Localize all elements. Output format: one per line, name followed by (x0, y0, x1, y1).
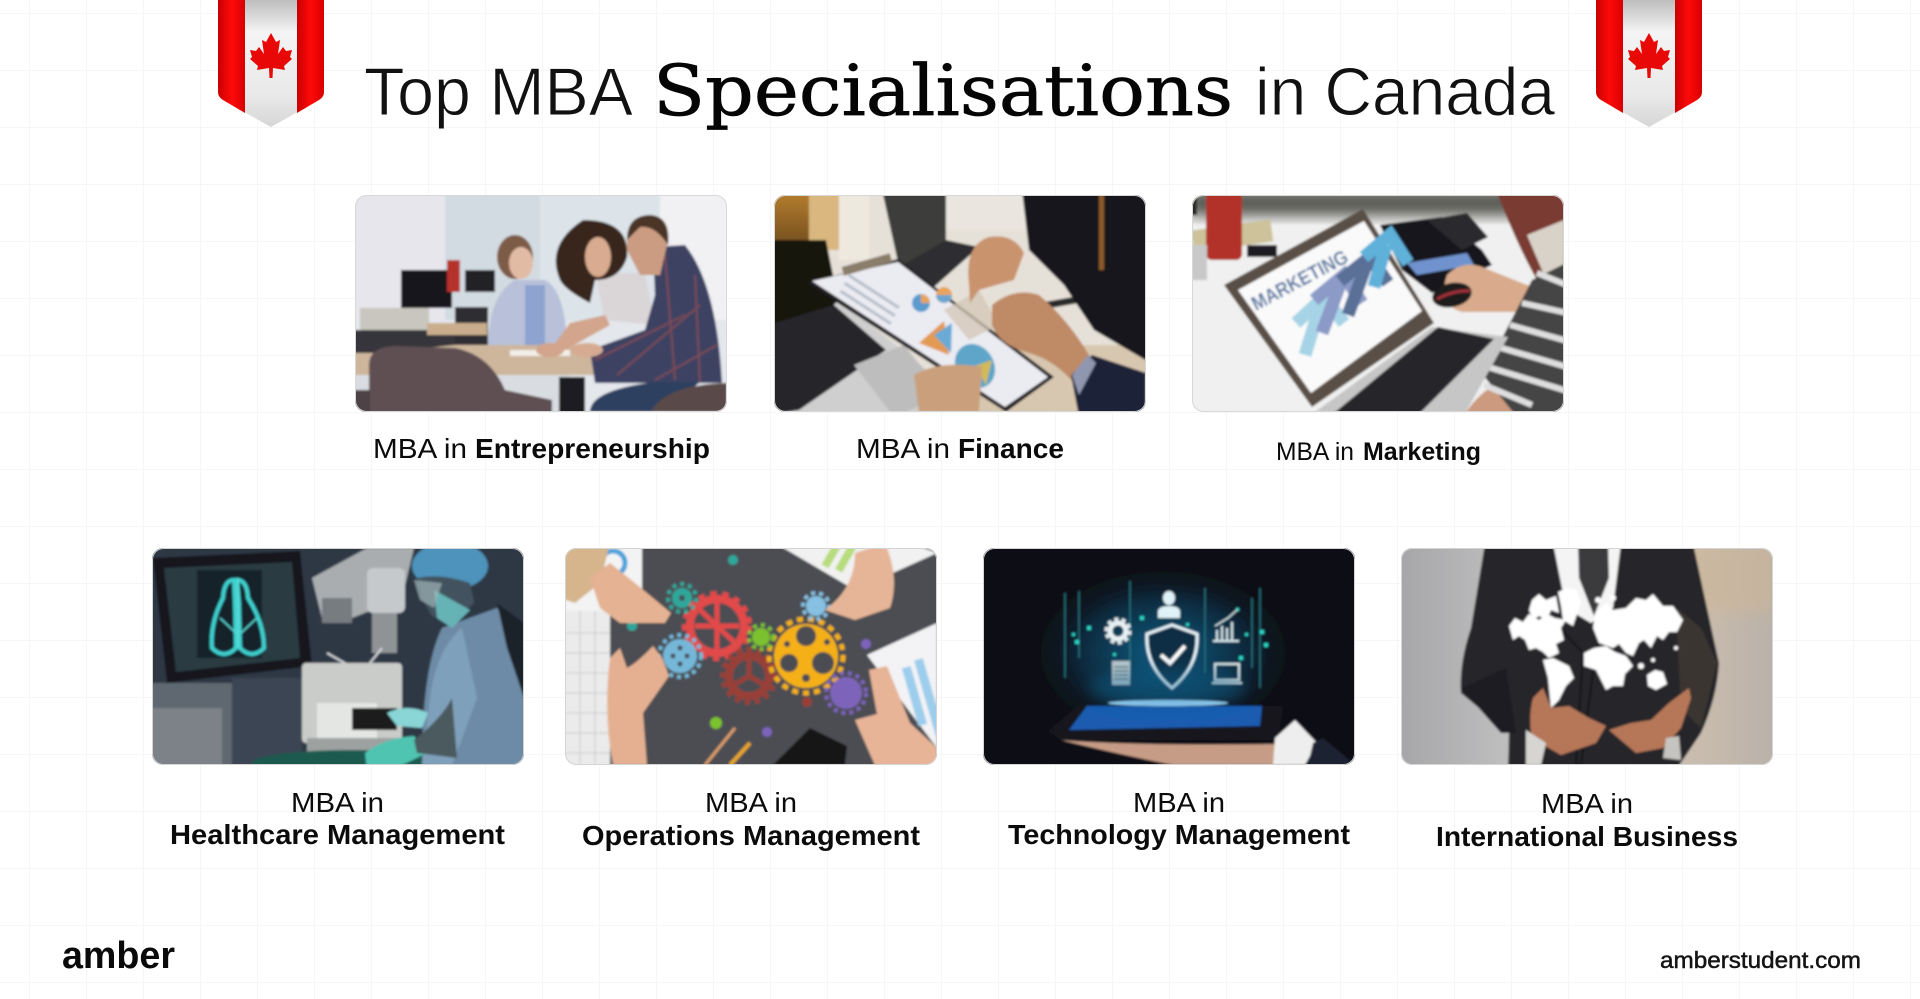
hands (968, 236, 1024, 303)
panel: MBA in Technology Management (978, 543, 1360, 850)
suit (1022, 190, 1154, 365)
flag: left Canadian banner (218, 0, 324, 127)
title (364, 50, 1555, 132)
logo: amber: amber (62, 935, 175, 977)
panel: MBA in Healthcare Management (147, 542, 529, 850)
caption: International Business: International Business (1436, 821, 1738, 852)
hands (565, 548, 610, 604)
caption: Finance: MBA in (856, 433, 950, 464)
caption: Operations Management: MBA in (705, 787, 797, 818)
gear (1110, 623, 1126, 639)
panel: MBA in Operations Management (560, 543, 945, 851)
flag: right Canadian banner (1596, 0, 1702, 127)
woman centre (595, 273, 655, 325)
document (1112, 661, 1130, 685)
hair and shirt (1497, 195, 1564, 280)
panel: MBA in Finance (769, 190, 1154, 464)
caption: Healthcare Management: Healthcare Management (170, 819, 505, 850)
caption: Entrepreneurship: MBA in (373, 433, 467, 464)
caption: Healthcare Management: MBA in (291, 787, 384, 818)
title: Specialisations (653, 50, 1233, 132)
caption: Operations Management (582, 787, 920, 851)
caption: Entrepreneurship: Entrepreneurship (475, 433, 710, 464)
caption: Healthcare Management (170, 787, 505, 850)
clipboard (807, 259, 1054, 412)
caption: Marketing: Marketing (1363, 438, 1481, 466)
panel: MBA in International Business (1396, 543, 1778, 852)
caption: Technology Management (1008, 787, 1350, 850)
caption: Entrepreneurship (373, 433, 710, 464)
caption: International Business: MBA in (1541, 788, 1633, 819)
pencils and phone (705, 728, 735, 765)
man (590, 245, 722, 383)
caption: Operations Management: Operations Management (582, 820, 920, 851)
person (1158, 591, 1180, 618)
caption: International Business (1436, 788, 1738, 852)
photo: team at a desk (350, 190, 732, 417)
photo: clipboard with charts (769, 190, 1154, 417)
gears (685, 594, 775, 702)
photo: businessman holding a world map (1396, 543, 1778, 770)
panel: MBA in Entrepreneurship (350, 190, 732, 464)
chart (1213, 610, 1239, 641)
photo: surgeon with medical scanner (147, 542, 529, 776)
caption: Marketing (1276, 438, 1481, 466)
photo: holographic security icons above a tablet (978, 543, 1360, 770)
tablet (1048, 705, 1283, 740)
world map (1509, 588, 1683, 708)
items on desk (1380, 217, 1492, 293)
caption: Technology Management: MBA in (1133, 787, 1225, 818)
shield (1147, 625, 1197, 688)
panel: MBA in Marketing (1187, 190, 1572, 466)
photo: hands assembling gears (560, 543, 945, 771)
caption: Technology Management: Technology Management (1008, 819, 1350, 850)
hands (1530, 688, 1606, 755)
woman left (488, 280, 567, 345)
website url: amberstudent.com (1660, 947, 1861, 973)
laptop (1308, 327, 1508, 417)
photo: laptop showing marketing slide (1187, 190, 1572, 419)
title: Top MBA (364, 54, 634, 130)
photo: laptop showing marketing slide: MARKETING (1248, 246, 1352, 315)
title: in Canada (1255, 54, 1555, 130)
caption: Finance: Finance (958, 433, 1064, 464)
hand and mouse (1444, 265, 1532, 312)
caption: Marketing: MBA in (1276, 438, 1354, 466)
caption: Finance (856, 433, 1064, 464)
laptop (1215, 664, 1239, 680)
